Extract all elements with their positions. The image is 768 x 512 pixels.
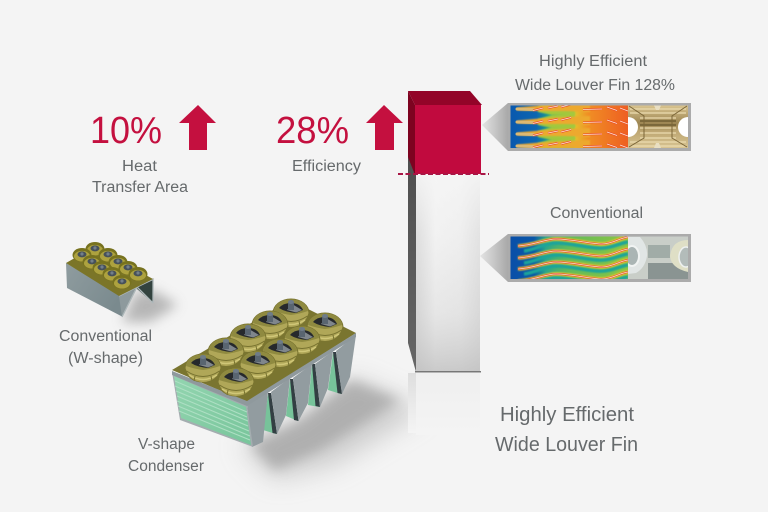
panel: highly efficient fin — [482, 53, 691, 152]
recess green coils — [263, 352, 342, 434]
illustration: V-shape condenser — [172, 298, 356, 447]
frame — [508, 234, 691, 282]
top plate — [66, 247, 153, 296]
increase column top — [408, 91, 482, 105]
pointer — [480, 234, 508, 282]
heading: Wide Louver Fin 128% — [515, 77, 675, 94]
metal fin photo — [628, 106, 688, 148]
value: 10%: 10% — [90, 110, 162, 152]
label: efficiency: Efficiency — [292, 158, 361, 175]
fans — [184, 298, 344, 396]
V panels — [247, 335, 356, 447]
slanted end panel — [119, 286, 138, 317]
conventional column side — [408, 120, 416, 372]
metal fin photo — [628, 236, 688, 279]
label: heat transfer area: Heat — [122, 158, 158, 175]
icon: up arrow — [179, 105, 216, 150]
label: highly efficient wide louver fin: Highly Efficient — [500, 403, 634, 426]
column reflection — [408, 373, 480, 435]
label: V-shape condenser: Condenser — [128, 458, 204, 475]
label: heat transfer area: Transfer Area — [92, 179, 188, 196]
stat: 28% efficiency — [276, 105, 403, 175]
frame — [508, 103, 691, 151]
shadow: V-shape condenser — [240, 378, 425, 480]
front face — [66, 263, 123, 317]
fans — [72, 242, 148, 289]
illustration: conventional W-shape unit — [66, 242, 178, 322]
conventional column front — [415, 175, 481, 372]
thermal image — [510, 236, 628, 279]
thermal image — [510, 106, 628, 148]
shadow — [122, 290, 178, 322]
increase column front — [415, 105, 481, 174]
rear inner wall — [136, 280, 153, 303]
label: conventional W-shape: Conventional — [59, 328, 152, 345]
heading: Conventional — [550, 205, 643, 222]
label: V-shape condenser: V-shape — [138, 436, 195, 453]
top deck — [172, 300, 356, 402]
increase column side — [408, 91, 415, 175]
heading: Highly Efficient — [539, 53, 648, 70]
green coil face — [172, 372, 253, 447]
pointer — [482, 103, 508, 151]
icon: up arrow — [366, 105, 403, 150]
top edge rail — [172, 333, 356, 406]
dashed baseline — [398, 173, 489, 175]
stat: 10% heat transfer area — [90, 105, 216, 196]
label: highly efficient wide louver fin: Wide Louver Fin — [495, 433, 638, 456]
value: 28%: 28% — [276, 110, 349, 152]
label: conventional W-shape: (W-shape) — [68, 350, 143, 367]
panel: conventional fin — [480, 205, 693, 286]
end profile — [119, 279, 153, 317]
bar chart: fin efficiency column — [398, 91, 489, 435]
